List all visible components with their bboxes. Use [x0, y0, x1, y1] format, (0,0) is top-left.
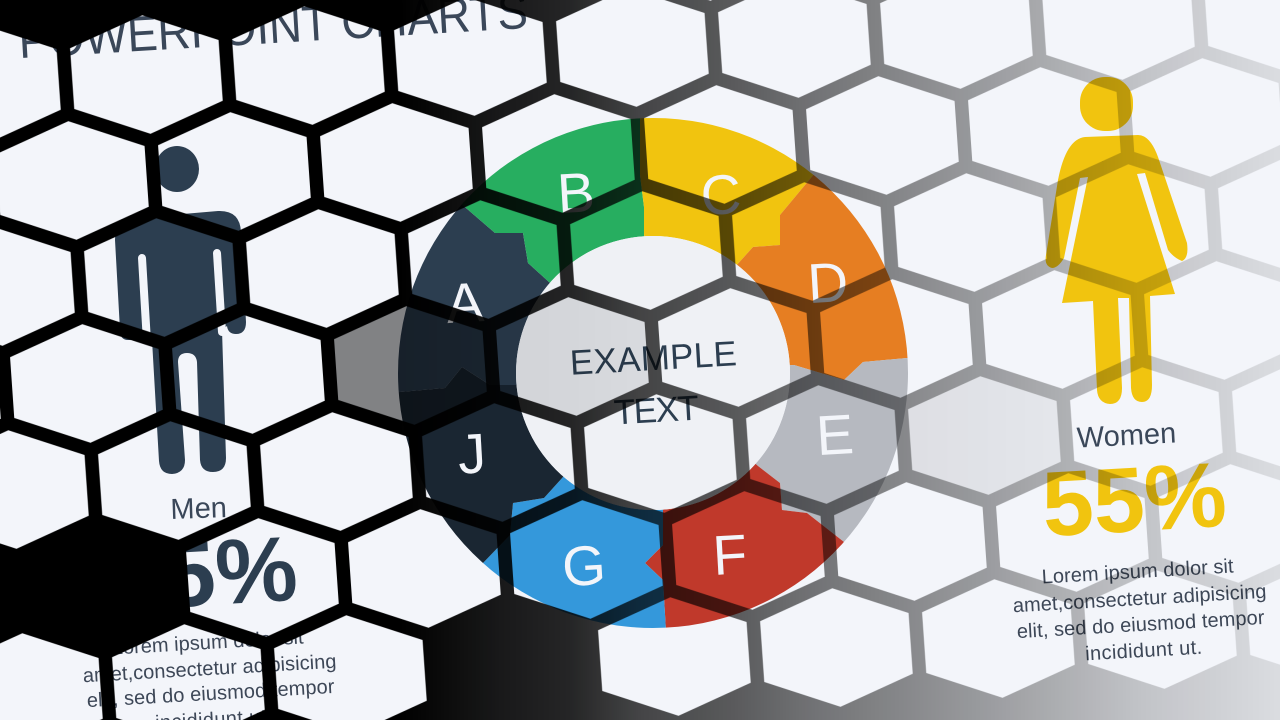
women description: amet,consectetur adipisicing [1012, 581, 1267, 617]
label: women: Women [1076, 417, 1177, 455]
women description: elit, sed do eiusmod tempor [1016, 607, 1265, 643]
icon: woman [1046, 77, 1187, 404]
segment letters: B [555, 160, 596, 225]
ring segments [398, 118, 908, 628]
label: men: Men [170, 492, 227, 526]
women description [1012, 555, 1267, 665]
segment letters: J [456, 421, 488, 486]
center text [569, 334, 738, 432]
center text: EXAMPLE [569, 334, 738, 383]
men description: Lorem ipsum dolor sit [111, 626, 305, 660]
segment letters: D [806, 250, 850, 315]
men description: amet,consectetur adipisicing [82, 651, 337, 687]
women description: Lorem ipsum dolor sit [1041, 555, 1235, 589]
segment letters: G [560, 533, 607, 598]
segment letters: F [711, 522, 749, 587]
men description: elit, sed do eiusmod tempor [86, 676, 335, 712]
segment letters: C [699, 162, 743, 227]
women percentage: 55% [1039, 444, 1229, 556]
icon: man [115, 146, 246, 474]
ring chart [398, 118, 908, 628]
men percentage: 45% [110, 518, 300, 630]
segment letters [444, 160, 855, 598]
men description [82, 626, 337, 720]
center circle [516, 236, 790, 510]
panel: women [1012, 77, 1267, 665]
panel: men [82, 146, 337, 720]
segment letters: A [444, 270, 486, 335]
segment letters: E [814, 402, 855, 467]
center text: TEXT [613, 389, 700, 432]
women description: incididunt ut. [1085, 637, 1203, 665]
